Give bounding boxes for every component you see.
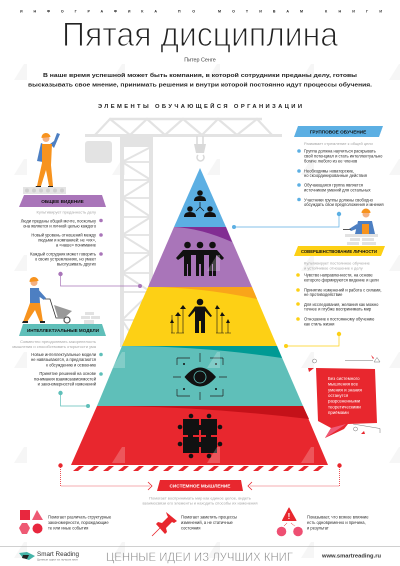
banner: [157, 480, 243, 491]
icon: man with arrows: [170, 299, 231, 333]
panel: team learning: [294, 126, 384, 207]
list: о своих устремлениях, но умеет: [35, 256, 96, 262]
connector: teal: [58, 391, 90, 408]
lead text: взаимосвязи его элементы и находить способы их изменения: [142, 500, 258, 506]
level: purple: [148, 227, 252, 287]
list: понимания взаимозависимостей: [34, 376, 96, 382]
footer logo: Smart Reading: [37, 551, 80, 558]
worker: wheelbarrow: [22, 277, 72, 323]
intro text: В наше время успешной может быть компания, в которой сотрудники преданы делу, готовы: [43, 72, 357, 79]
callout: приёмами: [328, 410, 349, 415]
icon: pin: [152, 512, 177, 536]
list: но скоординированные действия: [304, 173, 367, 178]
list: к обсуждению и освоению: [46, 362, 96, 368]
list: и закономерностей изменений: [38, 382, 96, 386]
banner: [294, 126, 383, 137]
footer logo: [19, 551, 80, 562]
list: Принятие решений на основе: [39, 371, 97, 376]
list: источником умений для остальных: [304, 188, 370, 192]
callout: мышления все: [328, 382, 359, 387]
list: [304, 148, 384, 207]
list: не навязываются, а предлагаются: [31, 357, 96, 362]
benefit 1: закономерности, порождающие: [48, 520, 109, 525]
lead text: [12, 339, 97, 349]
list: Каждый сотрудник может говорить: [30, 252, 96, 256]
bullets: [99, 219, 103, 256]
list: Группа должна научиться раскрывать: [304, 148, 376, 154]
bricks: [81, 312, 100, 324]
lead text: [142, 496, 258, 506]
list: [304, 272, 382, 326]
panel: personal mastery: [294, 246, 385, 326]
lead text: [304, 260, 371, 270]
banner: [294, 246, 385, 256]
title: Пятая дисциплина: [62, 16, 338, 54]
list: [31, 352, 97, 386]
footer url: www.smartreading.ru: [321, 554, 381, 560]
level: blue: [174, 168, 226, 227]
worker: raised arm: [35, 133, 60, 188]
panel: systems thinking: [142, 480, 258, 506]
lead text: Совместно преодолевать закоренелость: [20, 339, 96, 344]
footer slogan: ЦЕННЫЕ ИДЕИ ИЗ ЛУЧШИХ КНИГ: [106, 552, 294, 564]
icon: warning: !: [288, 512, 290, 521]
list: не противодействие: [304, 292, 343, 297]
bricks platform: [23, 187, 66, 194]
benefit 1: те или иные события: [48, 526, 88, 530]
section heading: ЭЛЕМЕНТЫ ОБУЧАЮЩЕЙСЯ ОРГАНИЗАЦИИ: [98, 102, 302, 110]
callout: теоретическими: [328, 404, 361, 409]
callout: останутся: [328, 393, 349, 398]
header kicker: МОТИВАМ: [218, 10, 303, 14]
benefit 3: [307, 514, 369, 530]
callout: умения и знания: [328, 387, 363, 392]
list: она является и личной целью каждого: [23, 224, 97, 228]
list: Обучающаяся группа является: [304, 182, 363, 188]
list: точнее и глубже воспринимать мир: [304, 306, 372, 312]
bullets: [297, 149, 301, 201]
bullets: [296, 273, 300, 321]
list: Новый уровень отношений между: [31, 232, 97, 238]
lead text: мышления и способствовать открытости ума: [12, 344, 97, 349]
worker: bricklayer: [343, 208, 375, 234]
banner title: СОВЕРШЕНСТВОВАНИЕ ЛИЧНОСТИ: [301, 249, 378, 254]
footer rule: [0, 545, 400, 548]
author: Питер Сенге: [184, 58, 216, 64]
benefit 1: [48, 514, 112, 530]
banner: [19, 195, 106, 207]
benefit 2: состояния: [181, 526, 201, 530]
list: Необходимы новаторские,: [304, 168, 354, 174]
list: людьми и компанией: не «их»,: [38, 238, 96, 242]
banner: [19, 324, 106, 336]
icon: org people: [184, 190, 216, 217]
list: выслушивать других: [57, 262, 96, 266]
intro text: [28, 72, 372, 88]
list: Для исследования, желания как можно: [304, 302, 379, 307]
list: Чувство направленности, на основе: [304, 272, 373, 278]
icon: eye: [173, 353, 227, 400]
benefit 1: Помогает различать структурные: [48, 514, 112, 520]
icon: warning: [277, 508, 303, 536]
list: которого формируются видение и цели: [304, 278, 379, 282]
list: как стиль жизни: [304, 322, 334, 326]
list: Новые интеллектуальные модели: [31, 352, 96, 357]
banner title: ГРУППОВОЕ ОБУЧЕНИЕ: [310, 130, 366, 134]
connector: yellow: [284, 332, 341, 348]
panel: mental models: [12, 324, 106, 386]
list: Люди преданы общей мечте, поскольку: [21, 218, 97, 224]
lead text: Культивирует преданность делу: [37, 210, 96, 214]
connector: purple: [58, 272, 142, 288]
benefit 2: [181, 514, 237, 530]
benefit 3: Показывает, что всякое влияние: [307, 514, 369, 520]
hazard stripes row: [73, 466, 324, 471]
bricks: [345, 234, 378, 245]
level: yellow: [122, 287, 277, 346]
lead text: и устойчивое отношение к делу: [304, 266, 363, 270]
lead text: Культивирует постоянное обучение: [304, 260, 371, 266]
banner title: ИНТЕЛЛЕКТУАЛЬНЫЕ МОДЕЛИ: [27, 328, 100, 333]
header kicker: [20, 10, 382, 14]
callout: Без системного: [328, 376, 360, 381]
callout: [308, 355, 380, 438]
list: обсуждать свои предположения и мнения: [304, 202, 384, 207]
level: teal: [97, 346, 303, 406]
panel: shared vision: [19, 195, 106, 266]
list: Принятие изменений и работа с силами,: [304, 288, 382, 292]
header kicker: КНИГИ: [325, 10, 382, 14]
callout: разрозненными: [328, 399, 361, 404]
crane: [85, 119, 282, 347]
list: свой потенциал и стать интеллектуально: [304, 154, 383, 158]
list: Отношение к постоянному обучению: [304, 316, 374, 322]
lead text: Развивает стремление к общей цели: [304, 141, 373, 146]
icon: shapes: [19, 510, 43, 534]
connector: systems right: [248, 463, 342, 490]
benefit 2: Помогает заметить процессы: [181, 514, 237, 520]
icon: team: [176, 242, 224, 276]
list: а «наше» понимание: [56, 242, 97, 248]
benefit 3: и результат: [307, 526, 329, 530]
icon: puzzle: [178, 414, 222, 458]
bullets: [99, 353, 103, 376]
footer logo: Ценные идеи из лучших книг: [37, 558, 78, 562]
list: богаче любого из ее членов: [304, 158, 357, 164]
list: [21, 218, 97, 266]
connector: blue: [232, 212, 341, 229]
lead text: Помогает воспринимать мир как единое целое, видеть: [149, 496, 251, 500]
connector: systems left: [58, 463, 152, 490]
pyramid: [71, 168, 328, 465]
banner title: СИСТЕМНОЕ МЫШЛЕНИЕ: [170, 484, 230, 489]
header kicker: ПО: [178, 10, 195, 14]
benefit 2: изменений, а не статичные: [181, 520, 234, 525]
callout accents: [308, 355, 380, 434]
intro text: высказывать свое мнение, принимать решения и внутри которой постоянно идут процессы обучения.: [28, 82, 372, 88]
level: red: [71, 406, 328, 465]
banner title: ОБЩЕЕ ВИДЕНИЕ: [41, 199, 84, 204]
list: Участники группы должны свободно: [304, 198, 374, 202]
benefit 3: есть одновременно и причина,: [307, 520, 366, 525]
header kicker: ИНФОГРАФИКА: [20, 10, 157, 14]
